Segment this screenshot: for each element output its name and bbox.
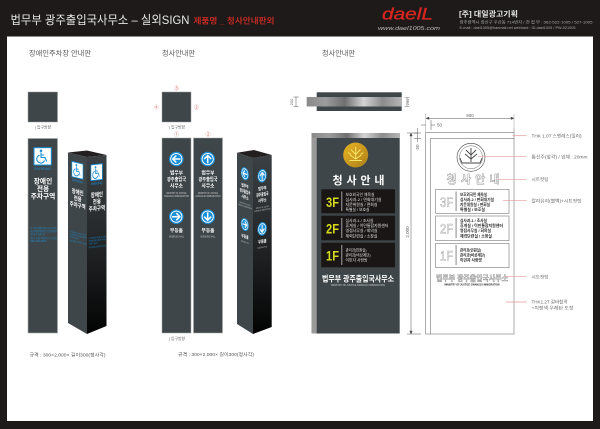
agency name: 사무소	[170, 182, 183, 190]
right face graphics	[89, 163, 106, 249]
icon: wheelchair	[34, 148, 51, 165]
outline	[426, 133, 514, 334]
hall name: 무등홀	[202, 227, 215, 234]
dimension: width	[426, 113, 514, 120]
floor box 2F: 2F	[440, 222, 453, 236]
english name: GWANGJU IMMIGRATION	[196, 195, 221, 198]
english name	[164, 193, 189, 198]
left face graphics: PARKING	[72, 178, 84, 185]
floor 3F: 심사과-2 / 면회대기실	[346, 196, 382, 202]
callout labels: 통신주(앞각) / 입체 : 20mm	[532, 154, 588, 160]
right face graphics: 전용	[93, 196, 101, 206]
floor box 3F: 보호외국인 체육실	[460, 191, 487, 197]
dimension: width: 900	[466, 113, 474, 118]
floor 3F: 특별실 / 보호실	[346, 206, 370, 212]
sign text	[31, 176, 55, 200]
floor 1F: 1F	[326, 248, 339, 264]
dimension: height: 2,000	[405, 226, 410, 238]
floor box 3F: 특별실 / 보호실	[460, 206, 485, 212]
plan square	[28, 92, 58, 122]
agency name: 법무부	[170, 170, 183, 176]
left face graphics: GWANGJU IMMIGRATION	[238, 203, 252, 211]
company info: E-mail : dael1005@hanmail.net webhard : ID-dael1005 / PW-021005	[460, 26, 576, 30]
floor box 1F	[436, 243, 509, 268]
floor box 2F: 휴게실 / 이민통합지원센터	[460, 222, 503, 228]
floor 2F	[321, 216, 395, 240]
sign text: 주차구역	[31, 192, 55, 200]
agency name	[198, 170, 218, 190]
dimension: top strip: 50	[415, 144, 420, 150]
dimension: top strip	[414, 128, 421, 150]
floor box 2F: 영접사무실 / 회의실	[460, 227, 491, 233]
english name: MINISTRY OF JUSTICE	[198, 193, 218, 195]
icon: up arrow	[200, 152, 215, 166]
face numbers: ④	[154, 104, 159, 111]
left face graphics: 자동차에 장애인이 탑승한 경우에만	[70, 231, 87, 240]
face numbers: ②	[194, 104, 199, 111]
front elevation	[28, 138, 58, 333]
floor box 1F: 1F	[440, 248, 453, 264]
outlined agency name: 법무부 광주출입국사무소	[436, 273, 509, 283]
plan square	[162, 92, 191, 122]
title: 제품명 _ 청사안내판외	[194, 16, 274, 26]
floor box 3F: 지문위원실 / 면회실	[460, 201, 490, 207]
perspective view	[237, 150, 272, 334]
floor 2F: 체력단련실 / 소장실	[346, 232, 378, 238]
blue notice lines: 자동차에 장애인이 탑승한 경우에만	[30, 229, 57, 233]
right face graphics: 이 구역은 장애인 자동차 표지가 부착된	[89, 234, 106, 240]
heading: accessible parking sign: 장애인주차장 안내판	[29, 48, 92, 58]
left face graphics: 광주출입국	[240, 187, 251, 196]
plan label: | 입구방향	[169, 124, 186, 130]
title: 법무부 광주출입국사무소 – 실외SIGN	[10, 13, 190, 27]
agency english: MINISTRY OF JUSTICE GWANGJU IMMIGRATION	[331, 283, 385, 287]
floor 3F: 지문위원실 / 면회실	[346, 201, 378, 207]
right face graphics: 법무부	[258, 185, 267, 192]
hall name: 무등홀	[170, 227, 184, 234]
face numbers: ②	[205, 131, 211, 138]
english name	[196, 193, 221, 198]
hall english: MUDEUNG HALL	[200, 236, 216, 238]
plan label: | 입구방향	[35, 124, 52, 130]
agency name: 법무부	[202, 170, 215, 176]
callout labels: 시트컷팅	[532, 176, 548, 183]
floor 3F: 보호외국인 체육실	[346, 191, 375, 197]
agency name: 광주출입국	[198, 176, 218, 183]
right face graphics: 무등홀	[258, 238, 267, 245]
dimension: height	[405, 133, 421, 334]
dimension: depth: 200	[289, 98, 294, 105]
panel: main directory sign	[289, 92, 402, 334]
dimension: side strip	[421, 114, 514, 133]
dimension: top view: 200	[405, 98, 410, 105]
icon: left arrow	[169, 152, 184, 166]
callouts	[478, 132, 588, 312]
callout labels: 칼라유리(불백)+시트컷팅	[532, 198, 582, 204]
heading: building guide sign 1: 청사안내판	[162, 48, 196, 58]
logo: dael: www.dael1005.com	[378, 26, 441, 32]
left face graphics: 주차구역	[70, 199, 86, 212]
spec text: 규격 : 300×2,000× 길이300(정사각)	[30, 352, 106, 358]
blue notice lines: 이 구역은 장애인 자동차 표지가 부착된	[30, 226, 56, 230]
heading: building guide sign 2: 청사안내판	[322, 48, 356, 58]
dimension: top view	[404, 98, 410, 106]
panel: technical drawing	[404, 98, 514, 334]
perspective view	[68, 150, 106, 334]
spec text: 규격 : 300×2,000× 길이300(정사각)	[178, 351, 254, 358]
company info: 광주광역시 광산구 우산동 714번지 / 전 접 부 : 062-522-1005 / 527-1005	[460, 20, 592, 25]
seal outline	[457, 143, 485, 171]
floor 3F	[321, 189, 395, 213]
sign body	[312, 133, 400, 334]
english name: GWANGJU IMMIGRATION	[164, 195, 189, 198]
left face graphics: MUDEUNG HALL	[241, 239, 249, 245]
hall english: MUDEUNG HALL	[169, 236, 185, 238]
agency name: 사무소	[202, 182, 215, 190]
floor 2F: 심사과-1 / 조사실	[346, 217, 374, 223]
agency name: 광주출입국	[167, 176, 186, 183]
parking label: PARKING	[34, 166, 52, 171]
right face graphics	[254, 168, 271, 250]
left face graphics: 위반시 과태료 10만원 부과 신고전화	[70, 238, 87, 246]
panel: parking sign	[28, 92, 106, 358]
outlined heading: 청 사 안 내	[446, 172, 500, 186]
callout lines	[478, 136, 527, 302]
face numbers: ①	[174, 131, 179, 138]
icon: down arrow	[200, 209, 215, 224]
floor 1F: 이민자 사랑방	[346, 256, 368, 262]
logo: dael	[378, 4, 441, 32]
floor 2F: 영접사무실 / 회의실	[346, 227, 378, 233]
floor 2F: 2F	[326, 222, 339, 236]
right face graphics: 사무소	[258, 197, 267, 204]
left face graphics: 사무소	[241, 193, 249, 201]
icon: right arrow	[169, 209, 184, 224]
sign text: 전용	[37, 184, 49, 193]
floor box 1F: 이민자 사랑방	[460, 256, 482, 262]
english name: MINISTRY OF JUSTICE	[166, 193, 187, 195]
right face graphics: 광주출입국	[256, 190, 269, 198]
right face graphics: GWANGJU IMMIGRATION	[254, 207, 271, 213]
left face graphics: 주차할 수 있습니다	[70, 234, 79, 241]
sign heading: 청 사 안 내	[332, 173, 384, 187]
floor box 1F: 관리과(비상계단)	[460, 252, 486, 258]
floor box 3F: 심사과-2 / 면회대기실	[460, 196, 494, 202]
floor 1F: 관리과(민원실)	[346, 246, 367, 252]
right face graphics: PARKING	[91, 181, 103, 186]
right face graphics: 주차구역	[89, 203, 105, 214]
logo: dael: daelL	[382, 4, 433, 24]
floor 1F: 관리과(비상계단)	[346, 252, 371, 258]
plan label lower: | 입구방향	[169, 336, 186, 341]
dimension: side strip: 50	[437, 122, 443, 128]
floor box 3F	[436, 189, 509, 213]
face numbers: ③	[174, 85, 179, 92]
right face graphics: 주차할 수 있습니다	[89, 240, 98, 246]
company info	[459, 8, 592, 30]
floor box 1F: 관리과(민원실)	[460, 246, 482, 252]
blue notice lines: 위반시 과태료 10만원 부과 신고전화	[30, 236, 57, 240]
left face graphics: 법무부	[241, 182, 249, 190]
agency name: 법무부 광주출입국사무소	[322, 274, 395, 284]
callout labels: +지정색 우레탄 도장	[532, 304, 574, 312]
agency name	[167, 170, 186, 190]
left face graphics: 전용	[74, 193, 82, 204]
floor 3F: 3F	[326, 195, 339, 210]
agency english: MINISTRY OF JUSTICE GWANGJU IMMIGRATION	[444, 282, 500, 286]
callout labels: THK 1.0T 스텐레스(밀러)	[532, 132, 582, 140]
right face graphics: 위반시 과태료 10만원 부과 신고전화	[89, 243, 106, 249]
left face graphics: 장애인	[72, 186, 84, 198]
gold seal	[343, 142, 368, 168]
right face graphics: MINISTRY OF JUSTICE	[256, 206, 269, 210]
blue notice lines	[30, 226, 57, 243]
sign text: 장애인	[34, 176, 52, 186]
company info: [주] 대일광고기획	[459, 8, 518, 18]
left face graphics	[238, 165, 252, 246]
face numbers	[154, 85, 211, 138]
callout labels: THK1.2T 갈바철곽	[532, 298, 568, 306]
floor 2F: 휴게실 / 이민통합지원센터	[346, 222, 389, 228]
blue notice lines: 주차할 수 있습니다	[30, 232, 45, 236]
blue notice lines: 062-000-0000	[30, 241, 47, 243]
left face graphics: MINISTRY OF JUSTICE	[239, 202, 251, 208]
floor box 2F: 심사과-1 / 조사실	[460, 217, 487, 223]
front elevation: face 2	[194, 138, 222, 333]
callout labels: 시트컷팅	[532, 274, 548, 280]
right face graphics: MUDEUNG HALL	[258, 245, 267, 250]
floor 1F	[321, 243, 395, 267]
left face graphics	[70, 161, 87, 246]
floor box 2F: 체력단련실 / 소장실	[460, 232, 492, 238]
floor box 2F	[436, 216, 509, 241]
top view	[307, 92, 402, 111]
panel: directional sign	[154, 85, 272, 358]
left face graphics: 이 구역은 장애인 자동차 표지가 부착된	[70, 229, 87, 237]
front elevation: face 1	[162, 138, 191, 333]
right face graphics: 자동차에 장애인이 탑승한 경우에만	[89, 237, 106, 243]
callout labels	[532, 132, 588, 312]
floor box 3F: 3F	[440, 195, 453, 210]
dimension: depth	[289, 97, 298, 106]
left face graphics: 무등홀	[241, 232, 249, 241]
right face graphics: 장애인	[91, 189, 103, 200]
